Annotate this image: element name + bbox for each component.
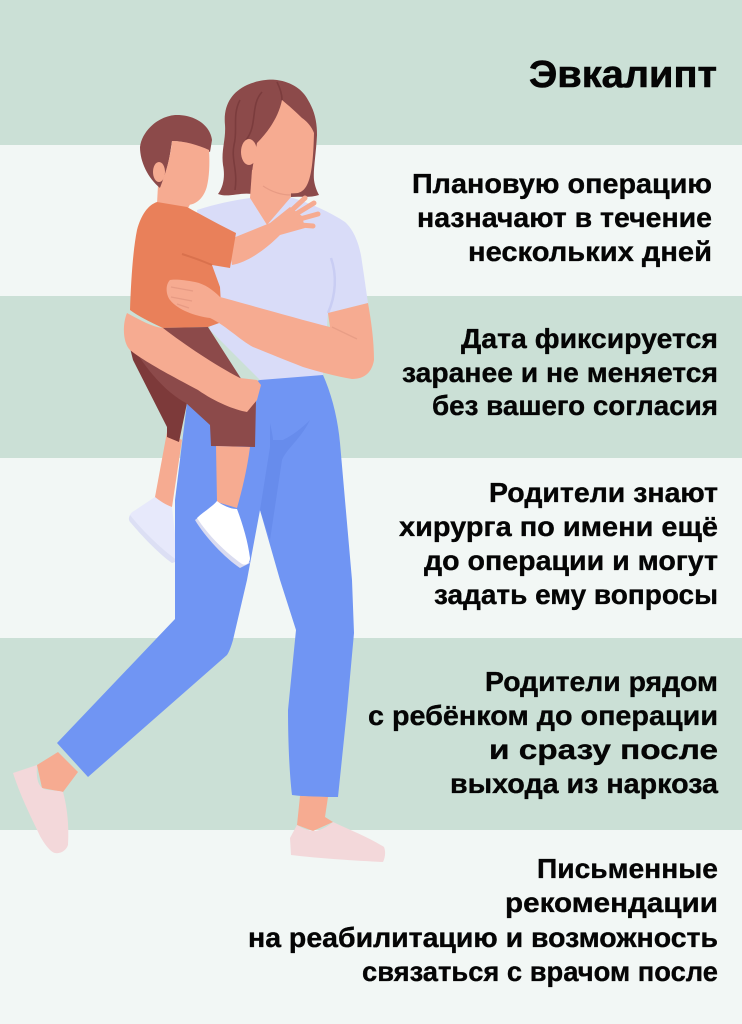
text block: written recommendations: на реабилитацию и возможность: [248, 922, 718, 953]
child's T-shirt fold: [182, 254, 212, 265]
child's far shoe sole: [129, 515, 178, 563]
woman's hair: [218, 80, 319, 197]
text block: written recommendations: рекомендации: [505, 887, 718, 918]
text block: parents nearby: выхода из наркоза: [450, 768, 719, 799]
text block: written recommendations: связаться с врачом после: [362, 956, 718, 987]
text block: parents nearby: с ребёнком до операции: [368, 700, 718, 731]
woman's blouse: [197, 197, 368, 380]
child's near shoe: [197, 501, 250, 565]
woman's rear shoe: [13, 765, 68, 853]
woman's trousers: [57, 375, 354, 797]
chin shadow: [263, 186, 291, 195]
woman's forearm and hand: [167, 280, 374, 379]
title: Эвкалипт: [529, 54, 717, 96]
child's far shoe: [130, 497, 178, 563]
text block: fixed date: [402, 323, 718, 421]
child's ear: [153, 162, 165, 182]
child's T-shirt: [130, 202, 236, 328]
text block: planned surgery: Плановую операцию: [412, 168, 712, 199]
text block: fixed date: без вашего согласия: [432, 390, 718, 421]
child's shorts: [135, 327, 256, 447]
child's near leg: [216, 446, 250, 508]
text block: known surgeon: Родители знают: [489, 477, 718, 508]
text block: planned surgery: нескольких дней: [468, 236, 712, 267]
text block: fixed date: Дата фиксируется: [461, 323, 718, 354]
text block: parents nearby: и сразу после: [489, 734, 718, 765]
woman's arm around child: [124, 313, 261, 412]
text block: parents nearby: Родители рядом: [485, 666, 718, 697]
child's far leg: [155, 432, 182, 507]
child's hair: [140, 115, 212, 188]
text block: fixed date: заранее и не меняется: [402, 357, 718, 388]
woman's front shoe: [290, 822, 385, 862]
hair strands: [233, 82, 282, 190]
woman's hand finger lines: [171, 287, 193, 308]
child's near shoe sole: [195, 512, 250, 568]
text block: known surgeon: хирурга по имени ещё: [399, 511, 718, 542]
arm fold: [332, 327, 357, 339]
sleeve fold: [328, 258, 335, 313]
text block: parents nearby: [368, 666, 719, 799]
text block: planned surgery: назначают в течение: [417, 202, 712, 233]
child's shorts far side: [128, 340, 200, 442]
woman's front ankle: [297, 796, 333, 831]
text block: known surgeon: [399, 477, 718, 610]
text block: planned surgery: [412, 168, 712, 267]
trouser fold shading: [260, 420, 310, 540]
illustration: mother carrying child: [13, 80, 385, 862]
text block: written recommendations: [248, 853, 718, 987]
child's arm and hand: [228, 198, 318, 265]
woman's ear: [241, 139, 257, 165]
text block: written recommendations: Письменные: [537, 853, 718, 884]
child's face: [160, 141, 209, 205]
child's neck: [157, 185, 195, 210]
woman's neck: [250, 170, 291, 225]
text block: known surgeon: задать ему вопросы: [434, 579, 718, 610]
text block: known surgeon: до операции и могут: [424, 545, 718, 576]
woman's rear ankle: [37, 752, 78, 792]
woman's face: [252, 100, 314, 193]
